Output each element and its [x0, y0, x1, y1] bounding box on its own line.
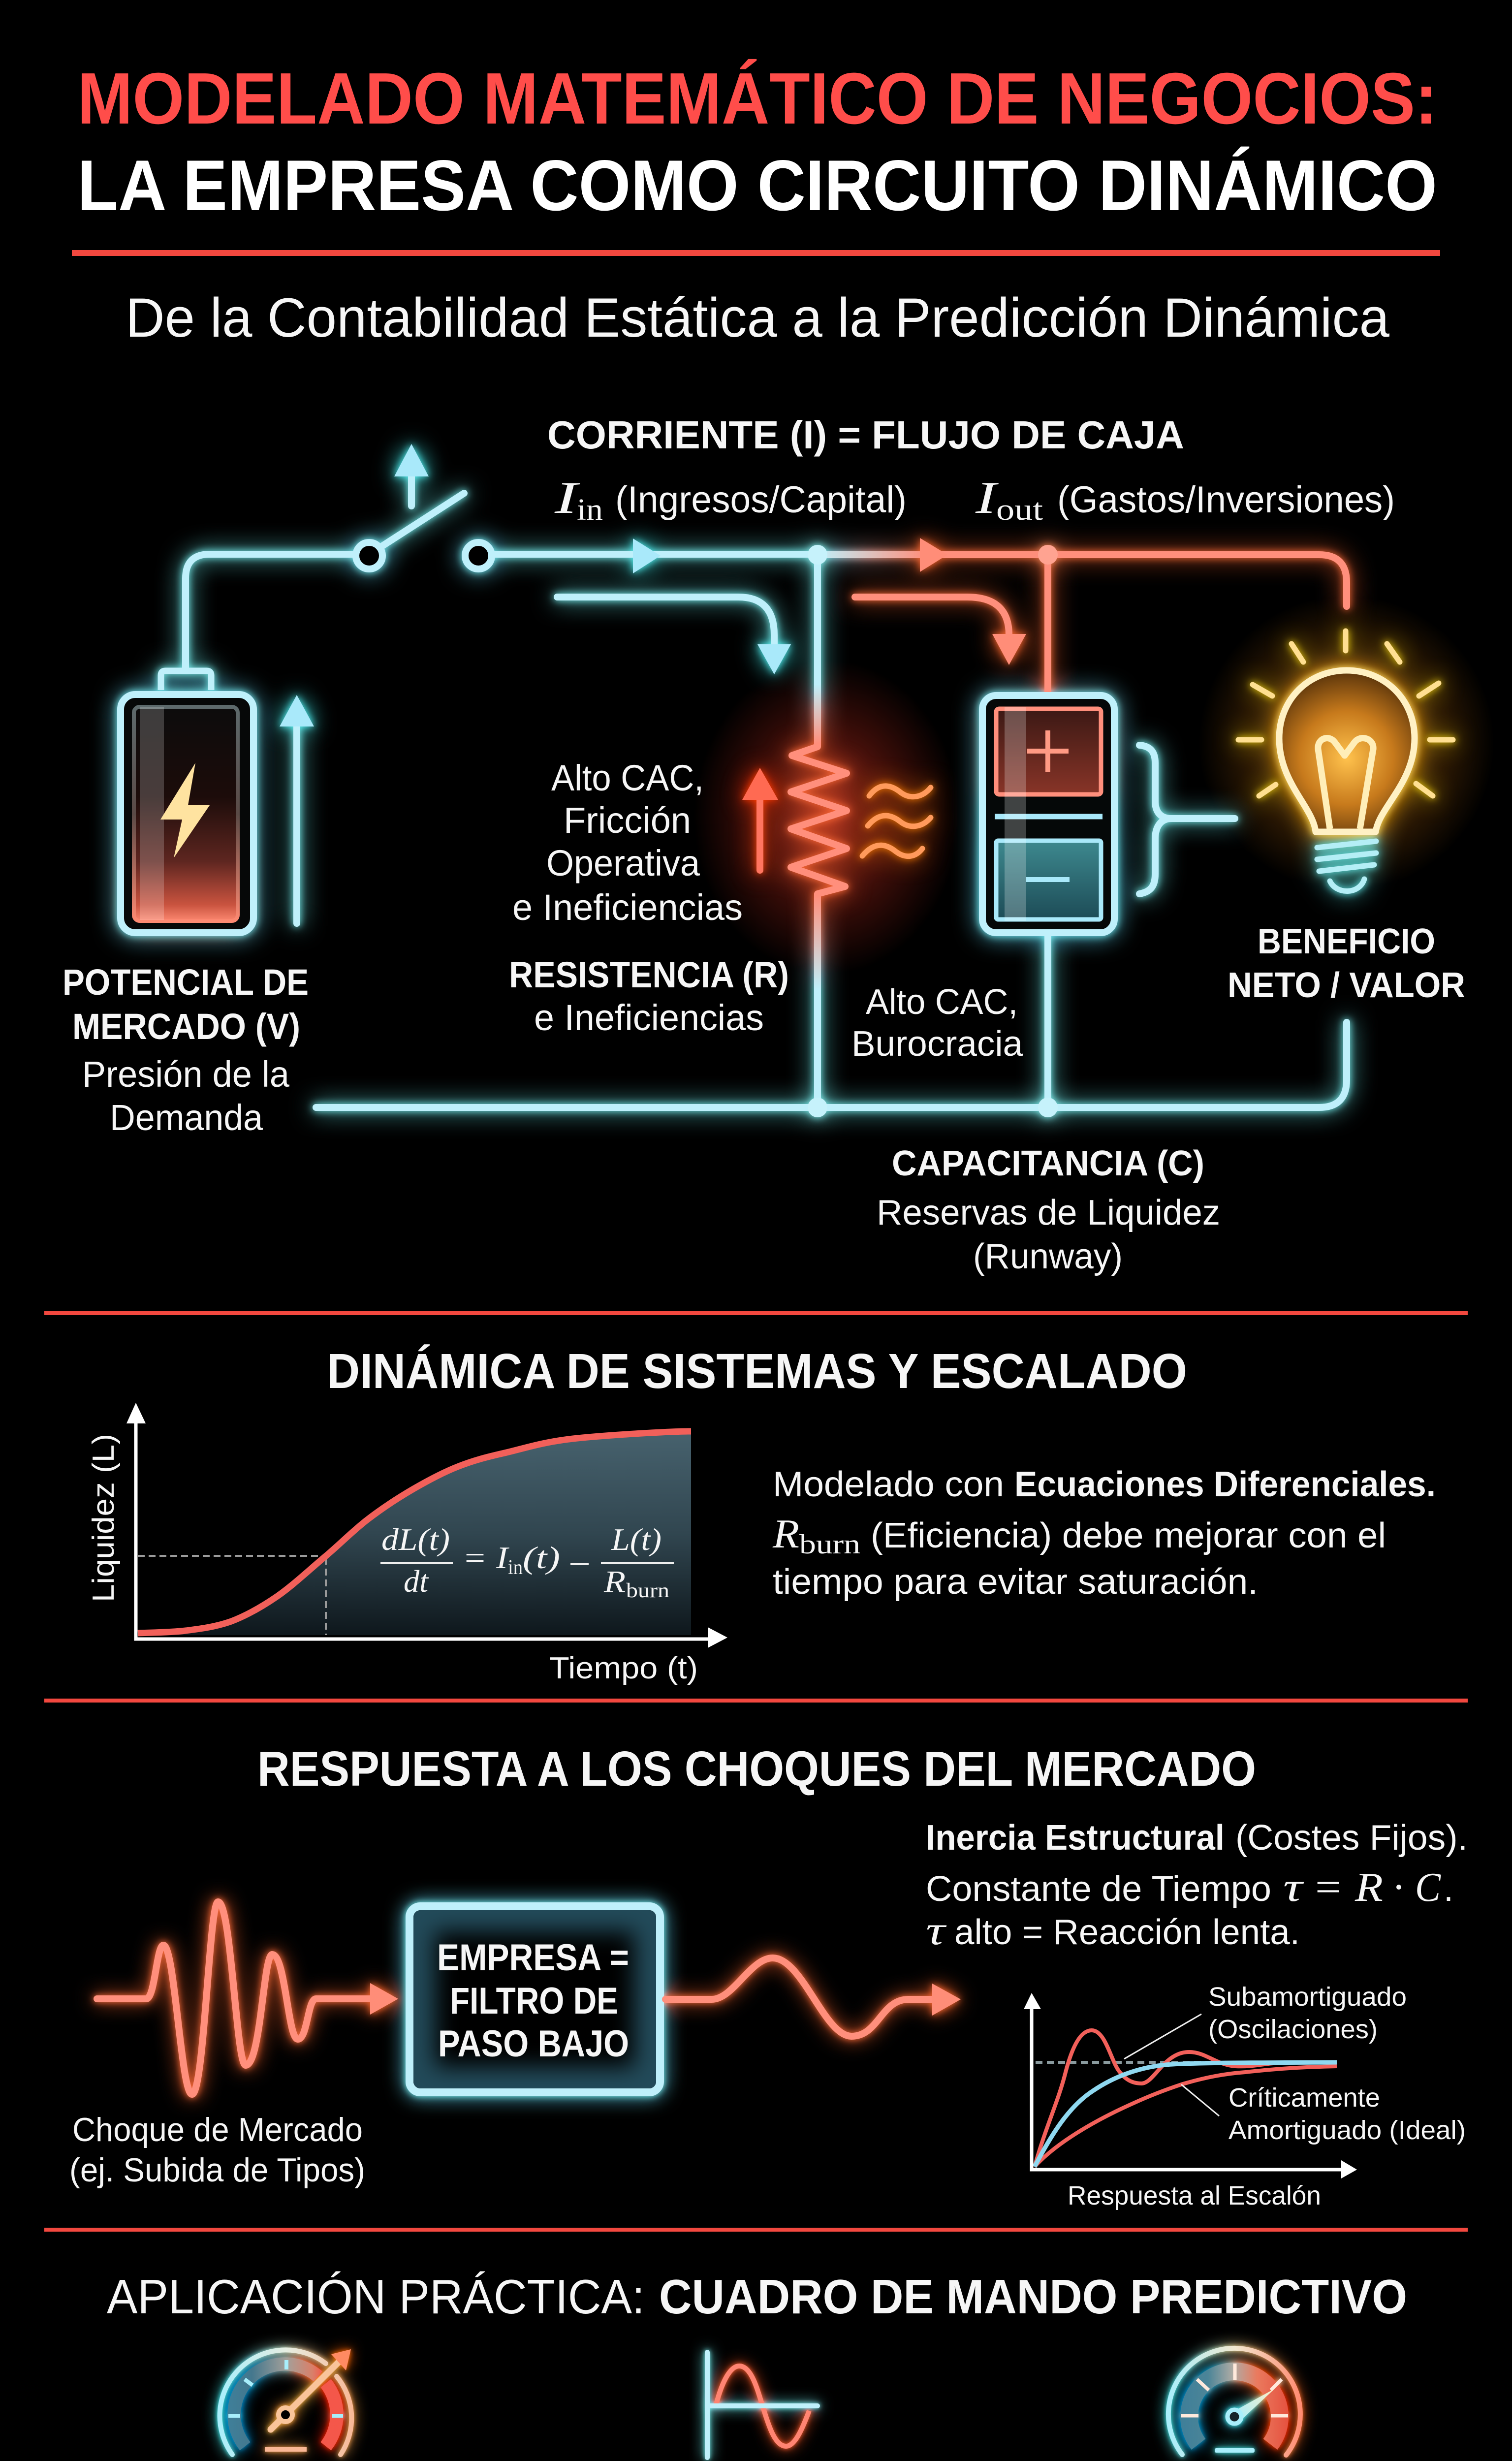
equation: dL(t)	[381, 1522, 450, 1557]
equation: (t)	[523, 1540, 560, 1575]
label: market potential: MERCADO (V)	[72, 1006, 300, 1047]
subtitle: De la Contabilidad Estática a la Predicción Dinámica	[126, 287, 1390, 348]
area under curve	[138, 1431, 691, 1635]
wire: top to bulb	[933, 555, 1347, 606]
wire: resistor branch bottom	[814, 894, 821, 1107]
capacitor	[982, 695, 1114, 933]
filter box inner glow	[413, 1910, 656, 2088]
label: market potential: Presión de la	[82, 1054, 290, 1095]
curve: underdamped	[1035, 2030, 1337, 2167]
label: friction: Operativa	[546, 843, 700, 883]
text block: differential equations	[772, 1465, 1436, 1602]
arrow: output current	[920, 538, 947, 572]
text block: structural inertia: Inercia Estructural	[926, 1818, 1225, 1858]
label: market potential: POTENCIAL DE	[63, 962, 309, 1003]
label: market potential	[63, 962, 309, 1138]
arrow: market potential	[280, 695, 314, 923]
wire: resistor branch top	[814, 555, 821, 747]
label: capacitance: (Runway)	[973, 1237, 1123, 1276]
wire: top right red	[818, 551, 935, 558]
axes	[136, 1418, 711, 1639]
target line	[1036, 2061, 1337, 2064]
diagram: low-pass filter	[97, 1902, 961, 2094]
panel: circuit diagram	[121, 444, 1453, 1117]
equation: in	[508, 1556, 523, 1579]
arrow: switch up	[394, 444, 429, 506]
icon: light bulb	[1238, 631, 1453, 891]
text block: structural inertia	[926, 1818, 1468, 1954]
wire: bulb return and bottom rail	[316, 1022, 1347, 1107]
icon: sine wave	[707, 2352, 818, 2458]
wire: switch to first node	[493, 551, 818, 558]
input arrow	[370, 1983, 398, 2015]
label: friction	[512, 757, 743, 928]
equation: =	[465, 1540, 485, 1575]
label: net profit: BENEFICIO	[1258, 922, 1435, 961]
text block: structural inertia: τ	[1283, 1864, 1304, 1910]
label: market potential: Demanda	[110, 1097, 263, 1138]
heading: practical application: APLICACIÓN PRÁCTICA:	[107, 2270, 645, 2324]
arrow: input current	[633, 538, 661, 573]
label: resistance: RESISTENCIA (R)	[509, 954, 789, 995]
equation: R	[603, 1564, 626, 1599]
curve: critically damped	[1035, 2066, 1337, 2167]
equation: dt	[404, 1564, 429, 1599]
heading: practical application	[107, 2270, 1407, 2324]
guide lines	[138, 1556, 326, 1635]
wire: capacitor top	[1044, 555, 1051, 692]
text block: differential equations: Modelado con	[773, 1465, 1004, 1504]
text block: differential equations: tiempo para evitar saturación.	[773, 1562, 1258, 1602]
switch	[356, 493, 492, 569]
icon: gauge	[1168, 2348, 1300, 2455]
text block: differential equations: Ecuaciones Diferenciales.	[1014, 1465, 1436, 1504]
label: friction: e Ineficiencias	[512, 887, 743, 928]
equation	[380, 1522, 674, 1602]
red glow behind resistor	[694, 660, 960, 975]
labels: Subamortiguado	[1208, 1982, 1407, 2012]
label: I out: I	[975, 473, 999, 523]
label: filter box text	[437, 1937, 629, 2065]
filter box	[410, 1906, 660, 2092]
amber glow behind bulb	[1199, 596, 1494, 891]
label: filter box text: EMPRESA =	[437, 1937, 629, 1979]
equation: burn	[626, 1579, 669, 1602]
labels: Amortiguado (Ideal)	[1228, 2115, 1466, 2145]
wire: battery to switch	[186, 554, 355, 669]
label: bureaucracy	[851, 982, 1023, 1064]
label: resistance	[509, 954, 789, 1038]
nodes	[808, 545, 1058, 1117]
input shock wave	[97, 1902, 374, 2094]
chart: liquidity over time	[87, 1403, 727, 1685]
text block: structural inertia: R	[1354, 1864, 1383, 1910]
heading: corriente: CORRIENTE (I) = FLUJO DE CAJA	[547, 413, 1184, 457]
arrow: resistor up	[742, 768, 778, 870]
text block: structural inertia: τ	[926, 1908, 947, 1954]
axes	[1032, 2006, 1344, 2170]
text block: structural inertia: C	[1415, 1864, 1441, 1910]
heading: dynamics: DINÁMICA DE SISTEMAS Y ESCALADO	[327, 1344, 1187, 1399]
label: market shock: (ej. Subida de Tipos)	[69, 2151, 365, 2189]
axis label: time: Tiempo (t)	[549, 1651, 698, 1685]
label: bureaucracy: Burocracia	[851, 1024, 1023, 1064]
icons row	[220, 2348, 1300, 2458]
label: I in: (Ingresos/Capital)	[615, 479, 907, 521]
equation: I	[496, 1540, 509, 1575]
text block: structural inertia: alto = Reacción lenta.	[954, 1913, 1300, 1952]
label: friction: Fricción	[564, 800, 691, 841]
output wave	[665, 1958, 935, 2036]
label: friction: Alto CAC,	[551, 757, 704, 798]
label: I in	[554, 473, 907, 527]
label: I in: in	[577, 493, 603, 527]
text block: structural inertia: ·	[1392, 1864, 1406, 1910]
text block: structural inertia: Constante de Tiempo	[926, 1869, 1271, 1909]
chart: step response	[1024, 1982, 1466, 2210]
icon: battery	[121, 671, 253, 933]
labels	[1068, 1982, 1466, 2210]
label: I out: out	[996, 493, 1043, 527]
wire: capacitor bottom	[1044, 936, 1051, 1107]
label: I in: I	[554, 473, 581, 523]
label: I out: (Gastos/Inversiones)	[1057, 479, 1395, 521]
text block: differential equations: (Eficiencia) debe mejorar con el	[871, 1516, 1386, 1555]
label: filter box text: FILTRO DE	[450, 1980, 618, 2022]
text block: structural inertia: (Costes Fijos).	[1235, 1818, 1468, 1858]
heading: practical application: CUADRO DE MANDO PREDICTIVO	[659, 2270, 1407, 2324]
text block: structural inertia: =	[1315, 1864, 1341, 1910]
equation: L(t)	[611, 1522, 662, 1557]
arrow: curved blue	[557, 597, 791, 674]
label: filter box text: PASO BAJO	[438, 2023, 629, 2065]
labels: Respuesta al Escalón	[1068, 2181, 1321, 2210]
label: capacitance	[877, 1144, 1220, 1276]
title	[77, 58, 1437, 225]
arrow: curved red	[855, 597, 1026, 665]
text block: differential equations: R	[772, 1511, 799, 1557]
label: net profit: NETO / VALOR	[1228, 966, 1465, 1005]
label: resistance: e Ineficiencias	[534, 997, 764, 1038]
text block: differential equations: burn	[799, 1529, 860, 1560]
label: capacitance: CAPACITANCIA (C)	[892, 1144, 1204, 1183]
heading: shocks: RESPUESTA A LOS CHOQUES DEL MERCADO	[257, 1741, 1256, 1797]
label: market shock	[69, 2111, 365, 2189]
labels: (Oscilaciones)	[1208, 2015, 1378, 2044]
resistor	[791, 747, 847, 894]
label: bureaucracy: Alto CAC,	[866, 982, 1018, 1022]
leader lines	[1124, 2014, 1219, 2116]
axis label: liquidity: Liquidez (L)	[87, 1434, 121, 1602]
text block: structural inertia: .	[1444, 1869, 1453, 1909]
icon: gauge with arrow	[220, 2349, 351, 2455]
output arrow	[932, 1984, 961, 2016]
label: market shock: Choque de Mercado	[72, 2111, 363, 2148]
labels: Críticamente	[1228, 2083, 1380, 2113]
brace	[1139, 745, 1235, 894]
label: capacitance: Reservas de Liquidez	[877, 1193, 1220, 1232]
title: LA EMPRESA COMO CIRCUITO DINÁMICO	[77, 145, 1437, 225]
label: net profit	[1228, 922, 1465, 1005]
curve	[138, 1431, 691, 1633]
label: I out	[975, 473, 1395, 527]
curve: ideal	[1035, 2062, 1337, 2167]
heat waves	[862, 786, 931, 856]
